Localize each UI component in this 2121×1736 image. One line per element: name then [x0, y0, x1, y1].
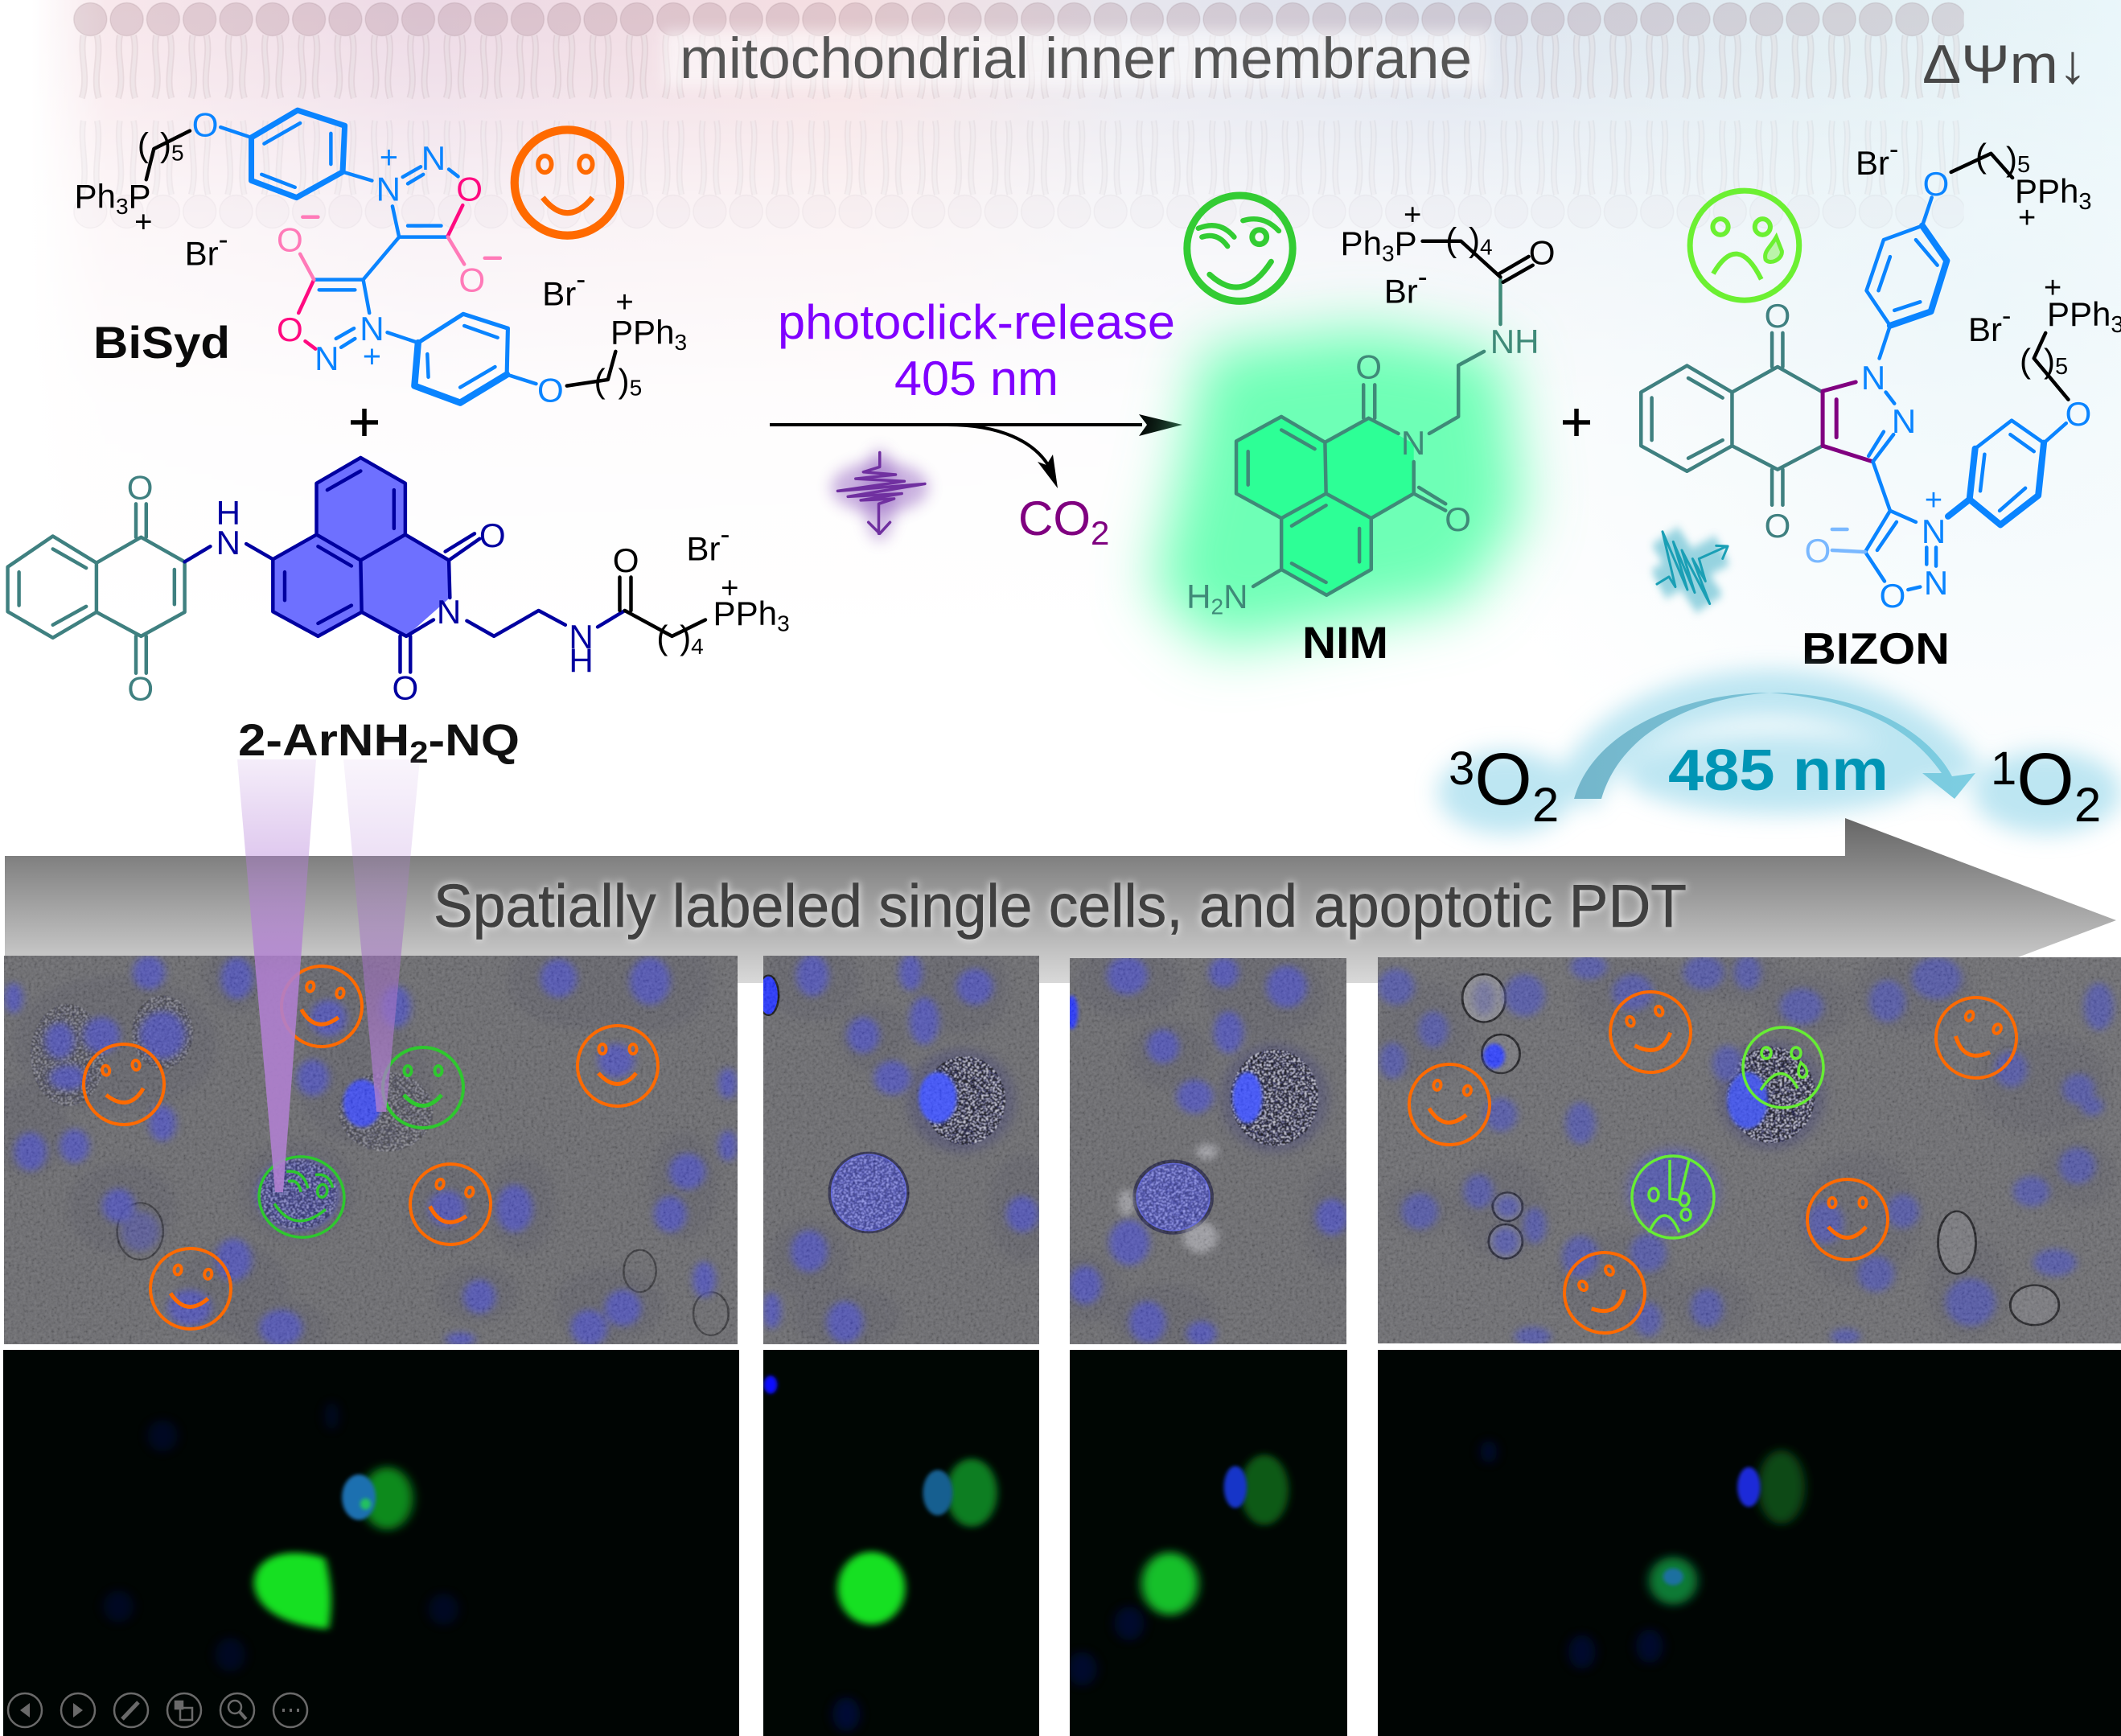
icon: violet photon wave: [831, 449, 928, 541]
molecule: BiSyd: 5: [630, 376, 642, 401]
label: NIM: NIM: [1302, 617, 1388, 668]
molecule: BIZON atoms: +: [2018, 201, 2036, 235]
label: BiSyd: BiSyd: [93, 317, 230, 368]
molecule: 2-ArNH2-NQ: 3: [777, 611, 790, 636]
molecule: BiSyd: ): [619, 362, 630, 400]
molecule: NIM with green fluorescence: 4: [1480, 234, 1493, 259]
molecule: BiSyd: -: [219, 223, 228, 255]
molecule: 2-ArNH2-NQ: H: [216, 494, 240, 532]
micrograph panel 2: [763, 956, 1039, 1344]
molecule: 2-ArNH2-NQ: -: [720, 518, 730, 550]
reaction arrow with CO2 release: [770, 414, 1182, 488]
label: 2-ArNH2-NQ: 2: [409, 736, 429, 770]
molecule: NIM with green fluorescence: 2: [1211, 594, 1223, 619]
molecule: 2-ArNH2-NQ: N: [216, 524, 240, 562]
molecule: NIM with green fluorescence: O: [1355, 348, 1382, 386]
molecule: BIZON atoms: 5: [2017, 152, 2030, 178]
molecule: BIZON atoms: Br: [1968, 311, 2002, 348]
molecule: BIZON atoms: 5: [2055, 354, 2068, 380]
label: 2-ArNH2-NQ: 2-ArNH: [238, 714, 393, 765]
molecule: BiSyd: ): [160, 126, 171, 164]
molecule: BiSyd: N: [360, 310, 384, 348]
reaction conditions: photoclick-release 405 nm: photoclick-release: [778, 295, 1175, 349]
label: BIZON: BIZON: [1802, 623, 1950, 673]
molecule: BiSyd: N: [314, 339, 339, 377]
icon: orange smiling face: [515, 130, 620, 236]
molecule: BiSyd: N: [421, 139, 446, 177]
molecule: BIZON atoms: O: [1765, 507, 1790, 545]
plus sign between products: [1563, 409, 1590, 436]
molecule: 2-ArNH2-NQ: O: [127, 469, 153, 507]
molecule: BiSyd: PPh: [610, 313, 675, 351]
molecule: BIZON atoms: PPh: [2015, 172, 2078, 210]
molecule: 2-ArNH2-NQ: O: [392, 668, 418, 706]
singlet oxygen generation 485 nm: [1437, 693, 2121, 834]
molecule: 2-ArNH2-NQ: N: [437, 593, 461, 631]
molecule: BIZON atoms: N: [1924, 564, 1948, 602]
molecule: BiSyd: P: [129, 177, 151, 215]
molecule: 2-ArNH2-NQ: Br: [686, 529, 720, 567]
molecule: BiSyd: O: [458, 261, 485, 298]
molecule: 2-ArNH2-NQ: [8, 458, 790, 708]
molecule: NIM with green fluorescence: N: [1401, 424, 1425, 462]
molecule: BiSyd: O: [537, 371, 564, 409]
molecule: BiSyd: +: [134, 204, 152, 239]
molecule: BiSyd: (: [594, 362, 606, 400]
icon: green crying face on dying cell: [1632, 1156, 1714, 1238]
banner arrow: [5, 818, 2116, 1022]
molecule: NIM with green fluorescence: O: [1445, 500, 1471, 538]
label: singlet oxygen: O: [2016, 738, 2074, 821]
micrograph panel 1: [0, 930, 738, 1356]
label: CO2: CO: [1018, 492, 1091, 545]
molecule: BIZON atoms: +: [1925, 483, 1942, 517]
fluorescence panel 4: [1378, 1350, 2121, 1736]
molecule: BiSyd: (: [138, 126, 149, 164]
banner text: Spatially labeled single cells, and apoptotic PDT: [434, 872, 1687, 940]
molecule: NIM with green fluorescence: -: [1418, 261, 1428, 293]
molecule: 2-ArNH2-NQ: O: [479, 516, 506, 554]
molecule: BiSyd: 5: [171, 141, 184, 166]
molecule: BIZON atoms: 3: [2078, 189, 2092, 215]
molecule: BIZON atoms: O: [1923, 165, 1949, 203]
label: triplet oxygen: 2: [1532, 778, 1559, 832]
molecule: 2-ArNH2-NQ: N: [569, 618, 594, 656]
molecule: BiSyd: +: [380, 140, 398, 175]
label: triplet oxygen: 3: [1449, 743, 1474, 795]
icon: green crying face on cell: [1743, 1027, 1823, 1108]
molecule: BIZON atoms: O: [1805, 532, 1831, 570]
micrograph panel 3: [1070, 958, 1346, 1344]
molecule: BIZON atoms: -: [2002, 301, 2011, 331]
label: triplet oxygen: O: [1474, 738, 1532, 821]
molecule: BiSyd: -: [576, 263, 586, 295]
molecule: BIZON atoms: PPh: [2047, 295, 2111, 333]
molecule: NIM with green fluorescence: NH: [1490, 323, 1539, 360]
molecule: BIZON atoms: ): [2044, 342, 2055, 380]
molecule: NIM with green fluorescence: Br: [1384, 272, 1418, 310]
molecule: BIZON atoms: (: [2020, 342, 2031, 380]
molecule: BiSyd: 3: [116, 194, 129, 219]
molecule: 2-ArNH2-NQ: ): [680, 619, 691, 656]
label: 2-ArNH2-NQ: -NQ: [429, 714, 520, 765]
molecule: NIM with green fluorescence: (: [1445, 221, 1457, 259]
label: CO2: 2: [1091, 514, 1109, 552]
molecule: NIM with green fluorescence: N: [1223, 578, 1248, 615]
molecule: NIM with green fluorescence: H: [1186, 578, 1211, 615]
molecule: BIZON atoms: Br: [1856, 144, 1889, 182]
molecule: BIZON atoms: +: [2044, 271, 2061, 305]
molecule: 2-ArNH2-NQ: O: [127, 670, 154, 708]
icon: green winking face: [1187, 195, 1293, 301]
plus sign between reagents: [351, 409, 378, 436]
membrane lipid bilayer: [72, 0, 1964, 233]
icon: labeled cell winking green: [253, 1150, 351, 1244]
reaction conditions: photoclick-release 405 nm: [778, 295, 1175, 405]
molecule: BiSyd: 3: [675, 330, 687, 355]
heading: mitochondrial inner membrane: mitochondrial inner membrane: [680, 27, 1472, 91]
molecule: BIZON bonds: [1641, 154, 2068, 590]
icons: faces marking cells, panel 4: [1403, 981, 2029, 1347]
light beam 1: [237, 759, 316, 1192]
molecule: BiSyd: N: [376, 170, 401, 208]
molecule: NIM with green fluorescence: 3: [1382, 241, 1395, 266]
label: membrane potential drop: ΔΨm↓: [1922, 34, 2087, 95]
molecule: BiSyd: [74, 106, 687, 409]
molecule: BIZON atoms: (: [1975, 137, 1987, 175]
molecule: BIZON atoms: ): [2006, 140, 2017, 178]
molecule: BIZON atoms: N: [1892, 402, 1916, 440]
molecule: 2-ArNH2-NQ: 4: [691, 634, 704, 659]
molecule: BIZON atoms: N: [1922, 512, 1946, 550]
molecule: NIM with green fluorescence: Ph: [1341, 224, 1382, 262]
icon: labeled cell smiling green: [383, 1047, 463, 1128]
molecule: BiSyd: Br: [185, 235, 219, 273]
molecule: 2-ArNH2-NQ: (: [656, 619, 668, 656]
molecule: NIM with green fluorescence: +: [1404, 197, 1421, 232]
molecule: 2-ArNH2-NQ: +: [721, 571, 738, 606]
molecule: NIM with green fluorescence: O: [1529, 233, 1556, 271]
label: singlet oxygen: 2: [2074, 778, 2101, 832]
molecule: BiSyd: Ph: [74, 177, 116, 215]
molecule: BiSyd: Br: [542, 274, 576, 312]
label: singlet oxygen: 1: [1991, 743, 2016, 795]
molecule: BiSyd: O: [456, 170, 483, 208]
curved arrow: [1574, 693, 1975, 799]
molecule: 2-ArNH2-NQ: H: [569, 642, 594, 680]
molecule: BIZON atoms: O: [1880, 577, 1905, 615]
icons: faces marking cells, panel 1: [77, 959, 658, 1334]
molecule: BiSyd: O: [277, 311, 303, 348]
molecule: BIZON atoms: N: [1861, 359, 1885, 397]
molecule: BIZON atoms: [1765, 134, 2121, 615]
reaction conditions: photoclick-release 405 nm: 405 nm: [894, 352, 1058, 405]
molecule: BIZON atoms: O: [1765, 297, 1790, 335]
molecule: BiSyd: +: [615, 285, 634, 319]
icon: teal emission wave: [1657, 532, 1728, 604]
molecule: BiSyd: O: [192, 106, 218, 144]
fluorescence panel 3: [1067, 1350, 1347, 1736]
molecule: BiSyd: +: [363, 339, 381, 375]
fluorescence panel 2: [763, 1350, 1039, 1736]
icon: green crying face: [1690, 191, 1799, 300]
micrograph panel 4: [1378, 947, 2121, 1346]
molecule: 2-ArNH2-NQ: O: [613, 541, 639, 579]
molecule: BIZON atoms: -: [1889, 134, 1898, 165]
molecule: BIZON atoms: O: [2066, 395, 2091, 433]
fluorescence panel 1: [3, 1350, 739, 1736]
molecule: NIM with green fluorescence: P: [1395, 224, 1417, 262]
molecule: NIM with green fluorescence: [1153, 197, 1556, 647]
molecule: NIM with green fluorescence: ): [1469, 221, 1480, 259]
molecule: 2-ArNH2-NQ: PPh: [713, 594, 777, 632]
label: 485 nm: 485 nm: [1668, 738, 1889, 803]
slideshow toolbar icons: [8, 1693, 307, 1727]
light beam 2: [343, 759, 420, 1112]
molecule: BiSyd: O: [277, 221, 303, 259]
